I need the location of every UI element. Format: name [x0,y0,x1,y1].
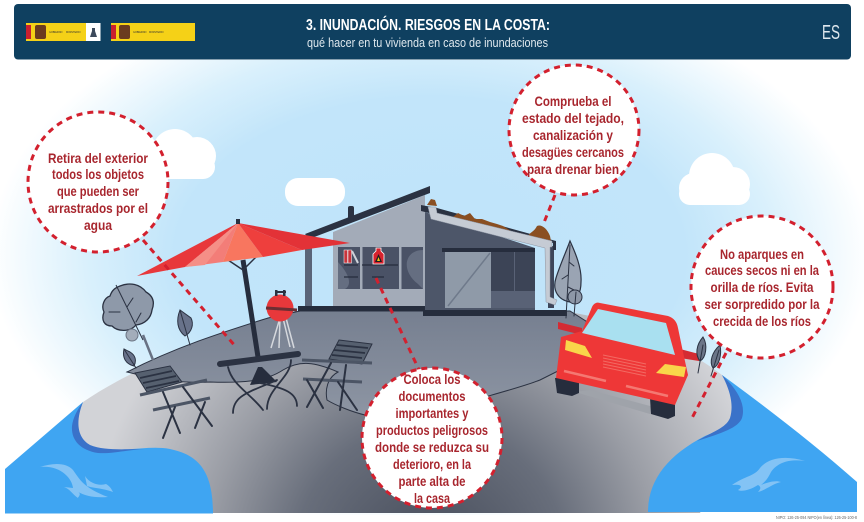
right column [548,246,554,308]
callout: documents: documentos [398,388,466,404]
small trees right [697,337,721,376]
callout: roof and drains: canalización y [533,127,613,143]
car shadow [575,390,665,414]
house [298,186,567,316]
callout: roof and drains: para drenar bien [527,161,619,177]
door [445,252,491,308]
callout: exterior objects: arrastrados por el [48,200,148,216]
cloud left [145,129,216,179]
callout: parking: ser sorpredido por la [704,296,820,312]
round tree [103,284,153,360]
house post [305,246,312,306]
subtitle: qué hacer en tu vivienda en caso de inundaciones [307,35,548,50]
callout: roof and drains [509,65,639,195]
car [555,303,699,419]
logo: ministry 2: GOBIERNO [133,31,147,34]
left roof [305,186,430,239]
left chair [135,366,212,438]
callout: parking: cauces secos ni en la [705,262,819,278]
callout: roof and drains: estado del tejado, [522,110,624,126]
callout: documents: productos peligrosos [376,422,488,438]
callout: roof and drains: Comprueba el [534,93,612,109]
callout: parking: orilla de ríos. Evita [710,279,814,295]
left water [5,402,213,514]
logo: ministry 2: MINISTERIO [149,31,164,34]
right chair [302,340,372,410]
callout: roof and drains: desagües cercanos [522,144,624,160]
right water [648,375,857,512]
header bar [14,4,851,60]
callout: documents: donde se reduzca su [375,439,489,455]
windshield [582,309,675,355]
chimney [348,206,354,220]
small plants [123,310,192,368]
callout: documents: Coloca los [404,371,461,387]
headlights [565,340,592,358]
mirrors [558,322,699,361]
window with shelves [338,247,423,289]
umbrella [137,219,350,357]
callout: exterior objects: todos los objetos [52,166,144,182]
cloud right [679,153,750,205]
right window [442,248,535,308]
callout: documents [362,368,502,508]
cloud centre [285,178,345,206]
leaves in gutter [427,199,551,241]
callout: parking [691,216,833,358]
car body [556,303,688,405]
callout: documents: parte alta de [398,473,466,489]
callout: documents: la casa [414,490,450,506]
icon: books [344,250,358,263]
right wall [425,212,535,310]
callout: exterior objects: agua [84,217,112,233]
grille [603,355,646,376]
callout: parking: No aparques en [720,246,804,262]
tree by house [555,241,582,318]
callout connectors [143,195,726,418]
wheels [555,378,675,419]
ground hill [72,312,745,513]
right roof [421,205,556,250]
logo: ministry 1: MINISTERIO [66,31,81,34]
language code: ES [822,22,840,44]
logo: ministry 1: GOBIERNO [49,31,63,34]
gutter and downpipe [428,207,557,305]
left wall [333,195,425,306]
callout: documents: importantes y [396,405,469,421]
callout: exterior objects [28,112,168,252]
callout: exterior objects: Retira del exterior [48,150,148,166]
callout: parking: crecida de los ríos [713,313,811,329]
title: 3. INUNDACIÓN. RIESGOS EN LA COSTA: [306,15,550,34]
logo: ministry 2 [111,23,195,41]
callout: documents: deterioro, en la [393,456,471,472]
icon: flammable bottle [373,248,384,264]
patio table [220,354,298,413]
callout: exterior objects: que pueden ser [57,183,139,199]
bbq grill [266,290,297,348]
bumper strips [564,371,668,396]
logo: ministry 1 [26,23,100,41]
terrace plate [127,311,600,415]
house base [298,306,567,316]
